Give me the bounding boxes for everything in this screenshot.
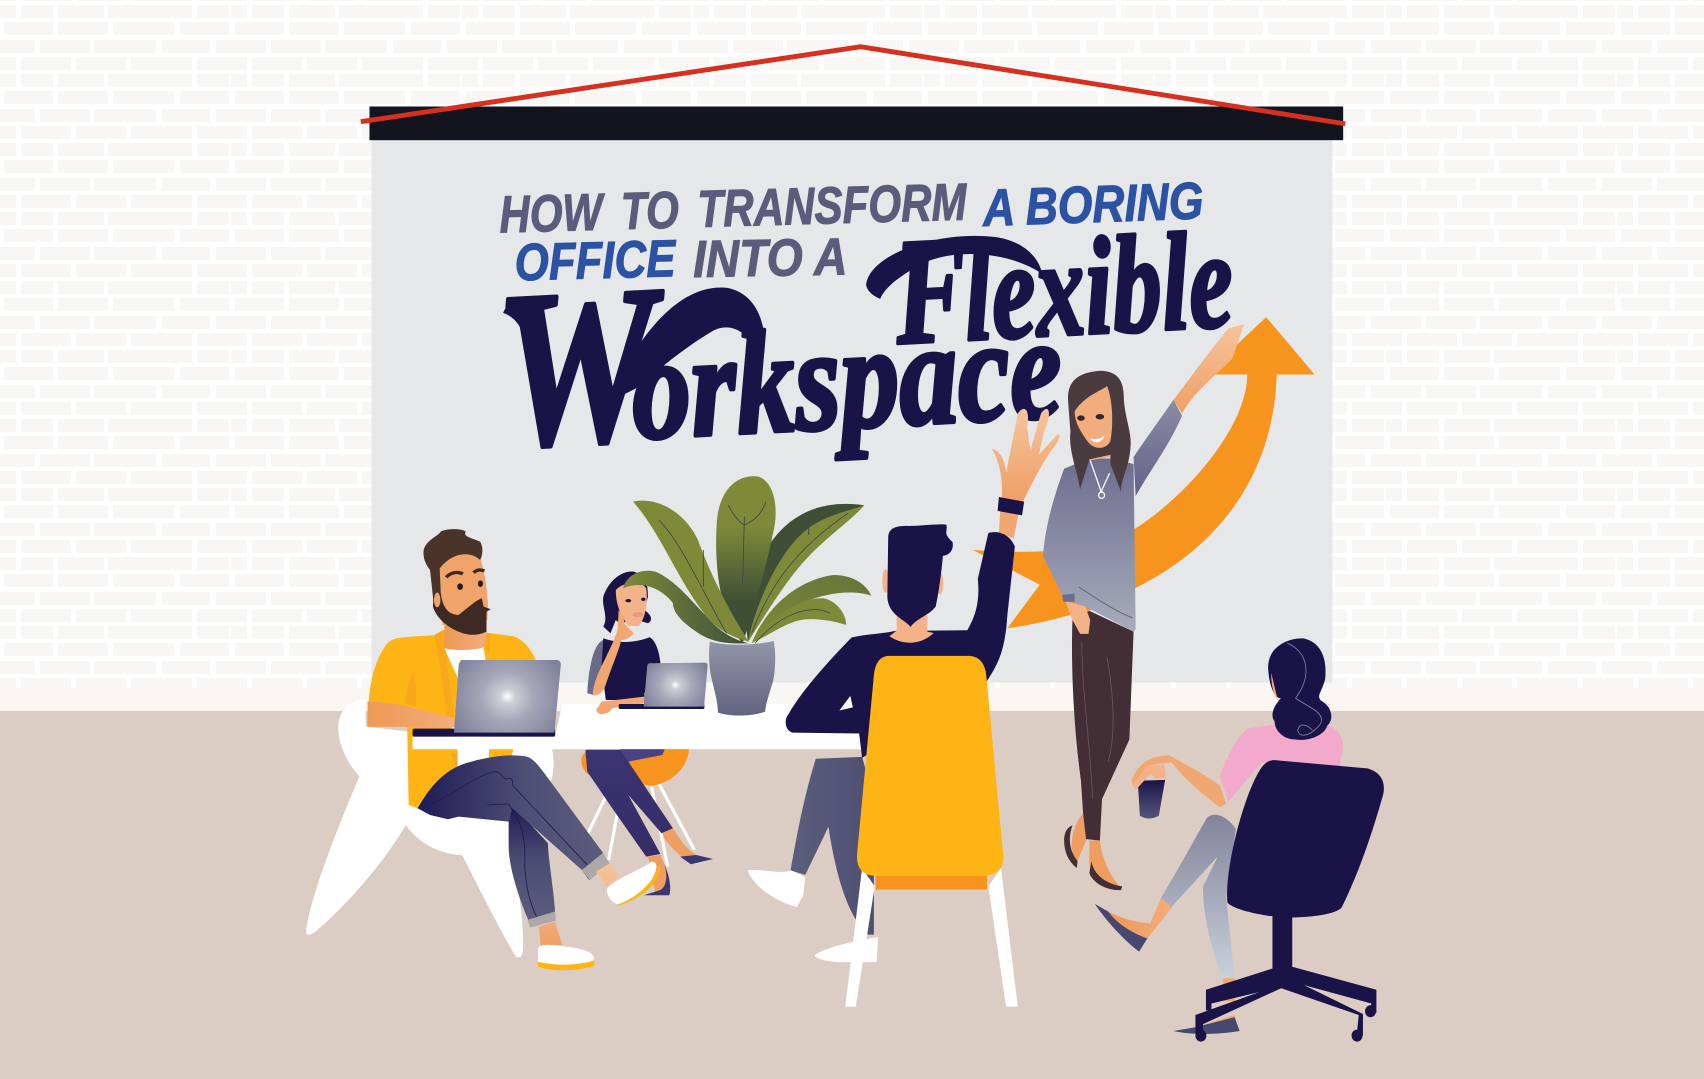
heading line: a boring: A BORING	[980, 172, 1204, 238]
pink top	[1220, 725, 1343, 801]
face	[616, 583, 647, 626]
eyes	[1077, 414, 1104, 421]
pot	[709, 641, 775, 716]
leaf: drooping left	[623, 571, 749, 643]
laptop	[454, 660, 561, 733]
hand	[1132, 765, 1166, 790]
brick wall background	[0, 0, 1704, 690]
floor	[0, 711, 1704, 1079]
shirt	[368, 630, 537, 808]
arm	[368, 702, 455, 727]
feet	[648, 828, 696, 893]
casters	[1195, 1005, 1376, 1042]
upper crossed leg	[418, 755, 609, 880]
arm	[1131, 756, 1226, 807]
white tee	[444, 647, 489, 767]
shoes	[1064, 825, 1122, 890]
leaf: tall centre	[716, 476, 776, 643]
hand	[1065, 601, 1090, 634]
face	[440, 554, 488, 625]
baseboard	[0, 688, 1704, 711]
grey legs	[1161, 815, 1236, 978]
cup	[1138, 780, 1165, 818]
shoe raised	[1095, 904, 1147, 952]
ear	[434, 593, 440, 607]
person: bearded man torso and head	[368, 529, 537, 808]
eyes	[625, 598, 645, 602]
chair legs	[845, 868, 1018, 1007]
hair	[603, 571, 651, 633]
eyebrows	[446, 570, 484, 577]
sleeves	[587, 640, 660, 695]
plant	[623, 476, 871, 716]
cheek	[1271, 673, 1278, 700]
ears	[882, 569, 943, 594]
neck	[1089, 443, 1110, 460]
necklace	[1090, 460, 1110, 498]
title	[492, 172, 1237, 494]
ankle raised	[1108, 898, 1172, 938]
ankles	[539, 864, 620, 947]
icon: orange growth arrow	[973, 317, 1315, 628]
stool legs	[588, 783, 694, 867]
leaf veins	[659, 502, 848, 643]
person: seated woman with coffee	[1095, 638, 1384, 1042]
trousers	[1072, 611, 1134, 840]
hair	[423, 529, 482, 603]
torso and arms	[786, 532, 1015, 758]
raised arm skin	[1174, 324, 1244, 413]
hair	[1268, 638, 1331, 740]
heading line: into a: INTO A	[693, 228, 848, 289]
leaf: right upper	[748, 505, 864, 642]
legs	[791, 757, 874, 935]
cuff	[1062, 593, 1075, 602]
sweater	[1043, 458, 1136, 632]
wristband	[998, 497, 1024, 515]
beard	[433, 593, 491, 635]
script word: workspace: Workspace	[492, 218, 1066, 494]
cuffs	[528, 853, 609, 928]
small laptop	[644, 663, 708, 707]
raised arm	[593, 610, 634, 696]
leaf: right lower	[752, 575, 871, 643]
person: bearded man legs and laptop	[413, 660, 660, 970]
leaf: left big	[633, 501, 749, 642]
office chair base	[1195, 967, 1376, 1036]
leaf: right bottom	[752, 598, 846, 643]
keyboard	[413, 729, 555, 737]
top	[602, 637, 660, 700]
leaf: back dark	[746, 504, 864, 642]
yellow chair back	[857, 656, 1003, 876]
feet	[1072, 813, 1122, 889]
sweater hem	[1079, 587, 1132, 618]
office chair back	[1227, 760, 1384, 918]
shoe floor	[1174, 1017, 1240, 1034]
projection screen panel	[372, 140, 1332, 682]
hair curls	[1287, 643, 1322, 735]
trouser creases	[1082, 643, 1113, 799]
keyboard	[619, 704, 704, 709]
neck	[889, 616, 934, 643]
hand	[992, 409, 1060, 502]
shoe: raised	[618, 865, 660, 906]
sleeve	[1134, 400, 1182, 496]
forearm	[999, 498, 1021, 538]
office chair stem	[1272, 914, 1292, 969]
hair	[887, 524, 953, 627]
jeans seams	[428, 772, 587, 917]
hanging rope	[361, 47, 1345, 124]
legs	[585, 750, 673, 857]
heading line: how to transform: HOW TO TRANSFORM	[499, 173, 969, 245]
chair: white lounge chair	[306, 699, 554, 957]
mouth	[633, 612, 643, 617]
smile	[1090, 436, 1105, 442]
lower leg	[509, 807, 555, 920]
person: presenter woman	[1043, 324, 1244, 890]
shirt folds	[405, 630, 491, 768]
resting arm	[596, 697, 644, 714]
neck	[444, 625, 487, 650]
arm gap	[839, 696, 853, 711]
heading line: office: OFFICE	[514, 230, 678, 292]
script word: flexible: Flexible	[890, 190, 1237, 377]
chair seat	[876, 876, 987, 890]
stool seat	[581, 749, 689, 786]
person: man from behind raising hand	[748, 409, 1060, 1007]
brick pattern	[0, 0, 1704, 688]
screen roller bar	[369, 106, 1343, 140]
main illustration	[306, 47, 1384, 1042]
hair	[1068, 371, 1131, 492]
lower leg skin	[1199, 978, 1239, 1033]
shoes	[748, 870, 878, 962]
eyes	[457, 580, 483, 590]
shoe: floor	[538, 959, 594, 970]
person: woman on stool with laptop	[581, 571, 713, 895]
table	[413, 704, 869, 749]
face	[1075, 386, 1112, 448]
